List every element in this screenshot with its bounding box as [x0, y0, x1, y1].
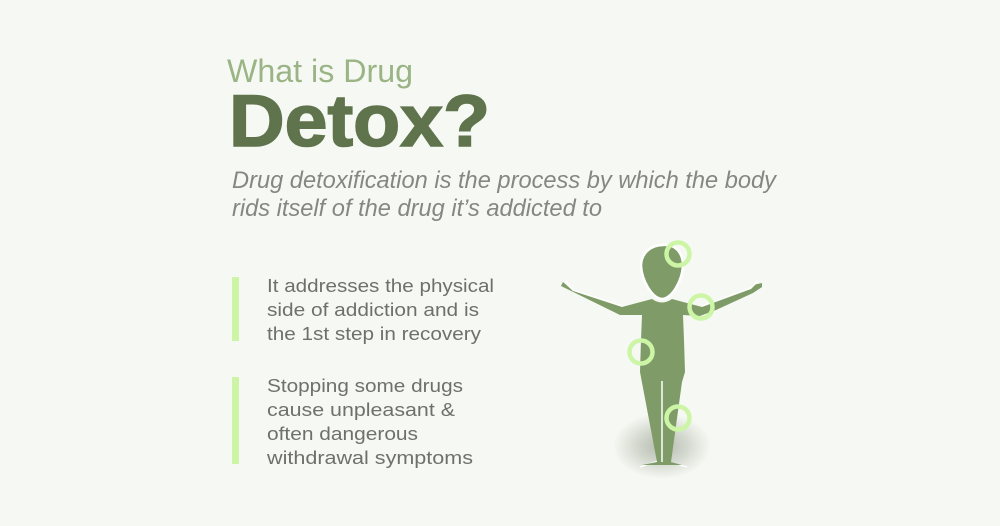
ground shadow — [613, 413, 711, 479]
bullet text 1: side of addiction and is — [267, 299, 479, 320]
bullet text 1 — [267, 275, 494, 344]
bullet text 1: the 1st step in recovery — [267, 323, 482, 344]
intro text: Drug detoxification is the process by which the body — [232, 167, 778, 194]
figure illustration — [561, 242, 762, 479]
bullet text 1: It addresses the physical — [267, 275, 494, 296]
foot highlights — [640, 461, 687, 467]
bullet text 2: often dangerous — [267, 423, 418, 444]
head — [641, 245, 683, 299]
heading: What is Drug: What is Drug — [227, 53, 413, 89]
bullet text 2: cause unpleasant & — [267, 399, 456, 420]
intro text: rids itself of the drug it’s addicted to — [232, 195, 602, 222]
bullet text 2: Stopping some drugs — [267, 375, 463, 396]
bullet bar 2 — [232, 377, 239, 464]
bullet text 2: withdrawal symptoms — [266, 447, 473, 468]
body — [561, 282, 762, 465]
heading: Detox?: Detox? — [229, 81, 490, 162]
leg gap — [661, 381, 663, 462]
bullet text 2 — [266, 375, 473, 468]
intro text — [232, 167, 778, 222]
rings — [630, 242, 712, 430]
arm highlights — [566, 281, 758, 306]
bullet bar 1 — [232, 277, 239, 341]
